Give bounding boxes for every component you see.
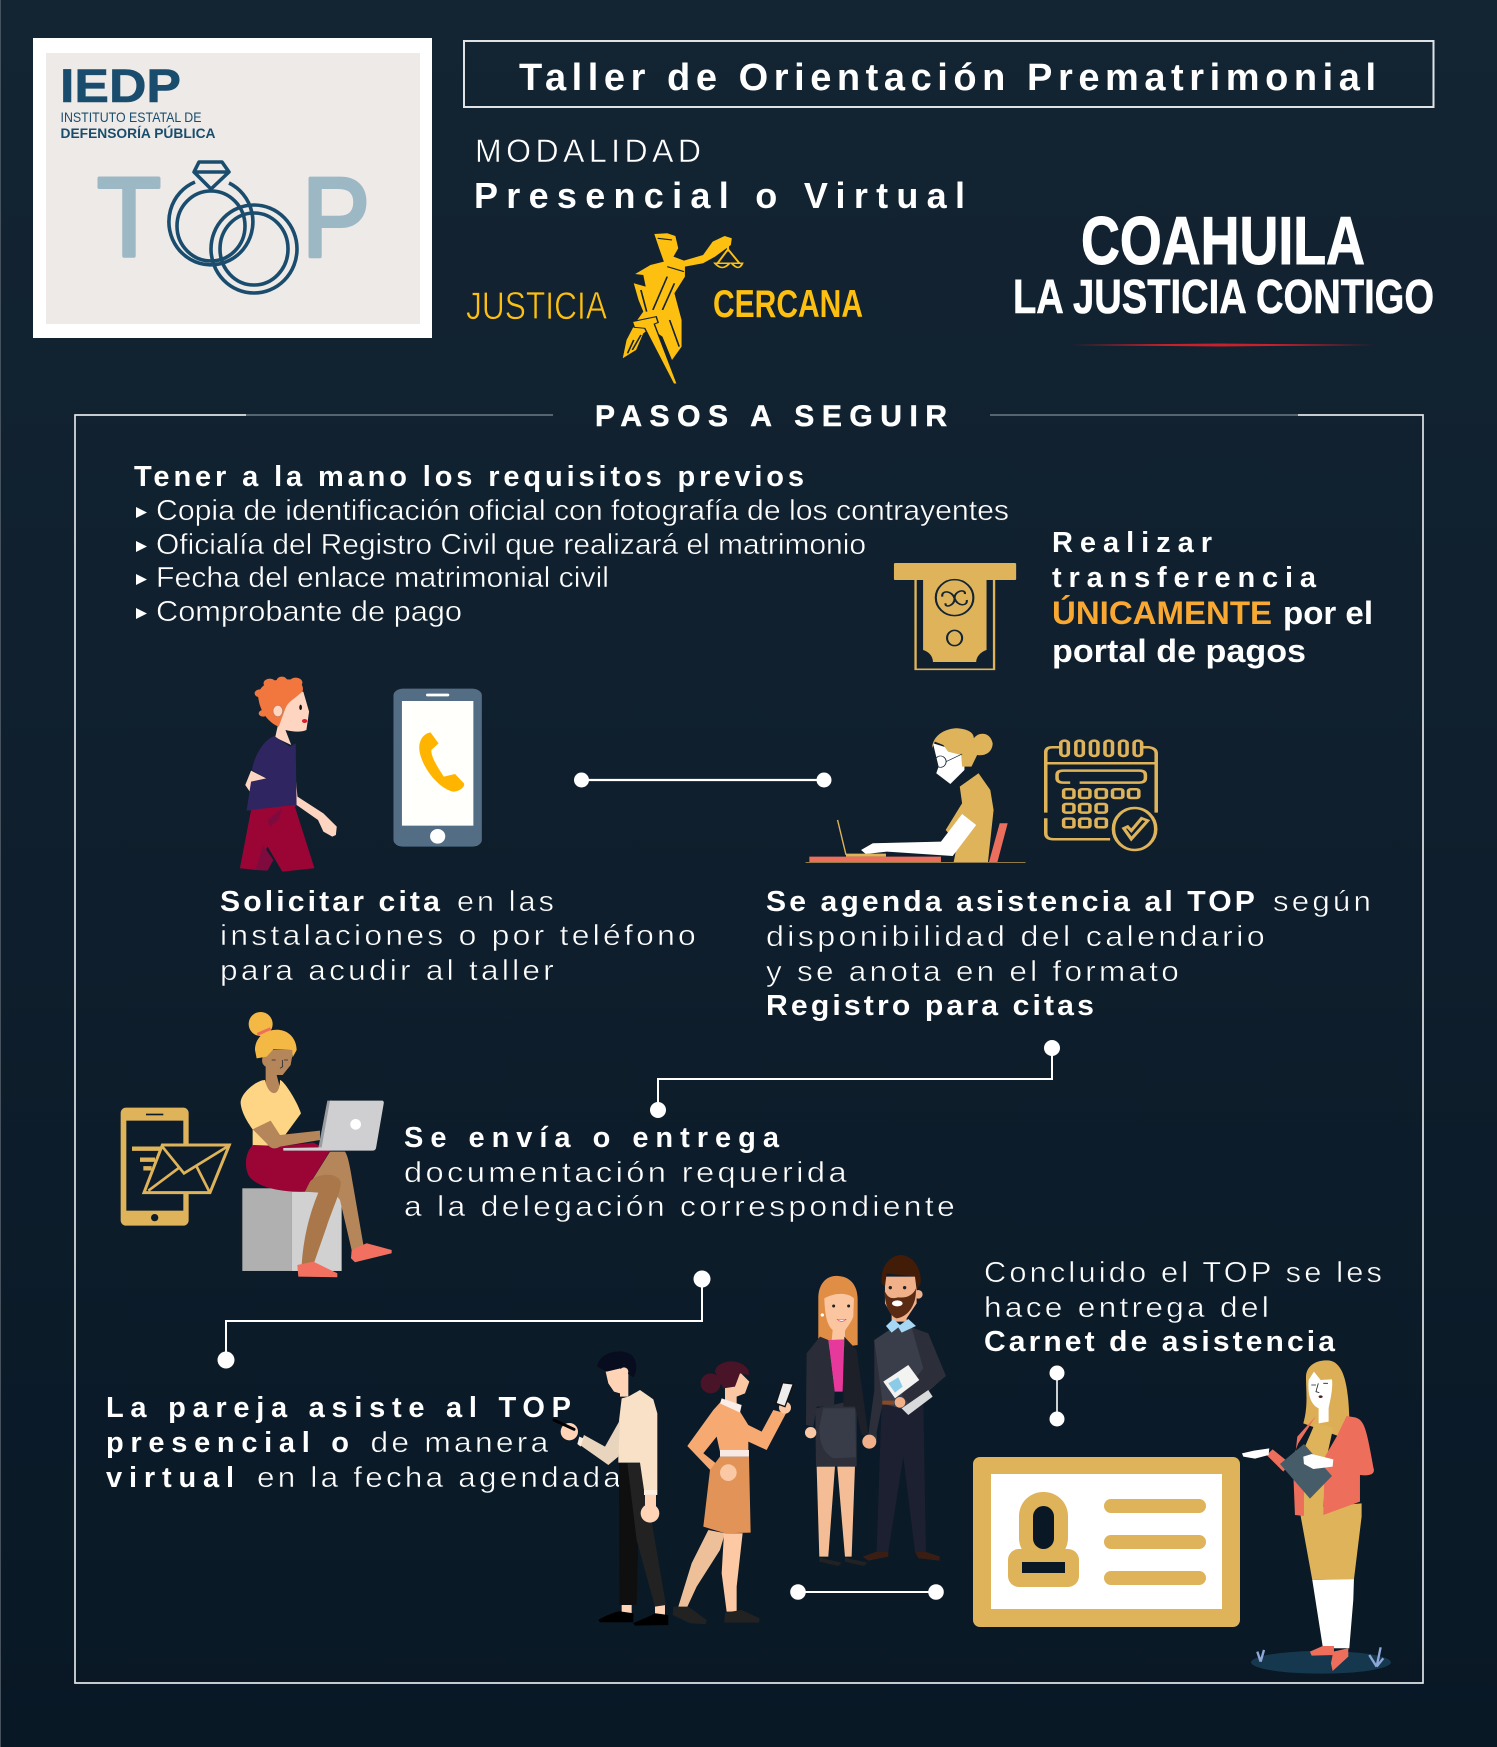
bullet list xyxy=(136,495,1009,628)
heading: Coahuila la justicia contigo xyxy=(1013,203,1434,346)
title text: Taller de Orientación Prematrimonial xyxy=(519,57,1376,99)
connector: step 3 to step 4 xyxy=(218,1270,710,1368)
icon: lady justice statue xyxy=(623,233,742,384)
requirements heading: Tener a la mano los requisitos previos xyxy=(134,461,804,493)
connector: carnet xyxy=(1050,1366,1064,1426)
bullet list: Comprobante de pago xyxy=(156,596,462,628)
text block: realizar transferencia: por el xyxy=(1283,595,1373,631)
illustration: woman with laptop on box xyxy=(241,1012,392,1277)
icon: wedding rings xyxy=(169,162,297,293)
red underline xyxy=(1070,344,1376,346)
logo: Justicia Cercana xyxy=(466,233,863,384)
icon: ID card xyxy=(973,1457,1240,1627)
text block: la pareja asiste xyxy=(106,1392,624,1494)
text block: se agenda asistencia: Se agenda asistencia al TOP xyxy=(766,886,1258,918)
title box xyxy=(464,41,1434,107)
text block: la pareja asiste: presencial o xyxy=(106,1427,349,1459)
text block: se agenda asistencia xyxy=(766,886,1374,1022)
text block: se envia o entrega xyxy=(404,1122,958,1223)
modality label: MODALIDAD xyxy=(475,133,701,169)
connector: step 2 to step 3 xyxy=(650,1040,1060,1118)
modality value: Presencial o Virtual xyxy=(474,175,965,216)
illustration: man with phone xyxy=(554,1351,668,1626)
logo letter P: P xyxy=(302,155,370,280)
text block: se envia o entrega: a la delegación correspondiente xyxy=(404,1191,958,1223)
text block: realizar transferencia: ÚNICAMENTE xyxy=(1052,595,1272,631)
text block: se agenda asistencia: y se anota en el formato xyxy=(766,956,1182,988)
text block: la pareja asiste: de manera xyxy=(370,1427,552,1459)
bullet list: Oficialía del Registro Civil que realizará el matrimonio xyxy=(156,529,866,561)
text block: solicitar cita: Solicitar cita xyxy=(220,886,443,918)
logo subtitle: instituto: INSTITUTO ESTATAL DE xyxy=(60,109,202,125)
text block: se agenda asistencia: según xyxy=(1273,886,1374,918)
text block: realizar transferencia xyxy=(1052,527,1373,669)
illustration: presenting woman xyxy=(1242,1360,1391,1674)
text block: la pareja asiste: en la fecha agendada xyxy=(257,1462,624,1494)
text block: realizar transferencia: portal de pagos xyxy=(1052,633,1306,669)
connector: step 1 to step 2 xyxy=(574,772,832,788)
text block: concluido el TOP: Concluido el TOP se les xyxy=(984,1257,1385,1289)
logo letter T: T xyxy=(97,155,161,280)
icon: calendar with check xyxy=(1046,741,1156,850)
text block: concluido el TOP: hace entrega del xyxy=(984,1292,1272,1324)
illustration: woman at desk xyxy=(806,728,1026,862)
text block: se envia o entrega: Se envía o entrega xyxy=(404,1122,780,1154)
icon: phone with call xyxy=(393,689,482,847)
text block: realizar transferencia: transferencia xyxy=(1052,562,1317,594)
text block: concluido el TOP: Carnet de asistencia xyxy=(984,1326,1338,1358)
text block: la pareja asiste: La pareja asiste al TOP xyxy=(106,1392,571,1424)
text block: se envia o entrega: documentación requerida xyxy=(404,1157,850,1189)
text block: se agenda asistencia: Registro para citas xyxy=(766,990,1097,1022)
icon: phone with envelope xyxy=(121,1108,229,1226)
text block: concluido el TOP xyxy=(984,1257,1385,1358)
text block: requisitos previos xyxy=(134,461,1009,628)
illustration: woman with phone xyxy=(673,1361,793,1624)
word: JUSTICIA: JUSTICIA xyxy=(466,285,607,328)
text block: solicitar cita xyxy=(220,886,699,987)
word: COAHUILA: COAHUILA xyxy=(1081,203,1365,279)
heading: pasos a seguir: PASOS A SEGUIR xyxy=(595,400,947,433)
icon: cash machine bill xyxy=(894,563,1016,669)
bullet list: Copia de identificación oficial con fotografía de los contrayentes xyxy=(156,495,1009,527)
word: CERCANA: CERCANA xyxy=(713,283,863,326)
panel: IEDP TOP logo xyxy=(33,38,432,338)
text block: solicitar cita: en las xyxy=(457,886,557,918)
panel: steps frame xyxy=(75,415,1423,1683)
text block: se agenda asistencia: disponibilidad del calendario xyxy=(766,921,1268,953)
bullet list: Fecha del enlace matrimonial civil xyxy=(156,562,609,594)
illustration: couple xyxy=(805,1255,946,1566)
text block: realizar transferencia: Realizar xyxy=(1052,527,1212,559)
text block: solicitar cita: para acudir al taller xyxy=(220,955,557,987)
text block: la pareja asiste: virtual xyxy=(106,1462,234,1494)
logo subtitle: defensoria: DEFENSORÍA PÚBLICA xyxy=(60,124,216,141)
logo heading: IEDP: IEDP xyxy=(60,59,181,112)
illustration: walking man xyxy=(240,677,337,872)
connector: bottom pair xyxy=(790,1584,944,1600)
text block: solicitar cita: instalaciones o por teléfono xyxy=(220,920,699,952)
